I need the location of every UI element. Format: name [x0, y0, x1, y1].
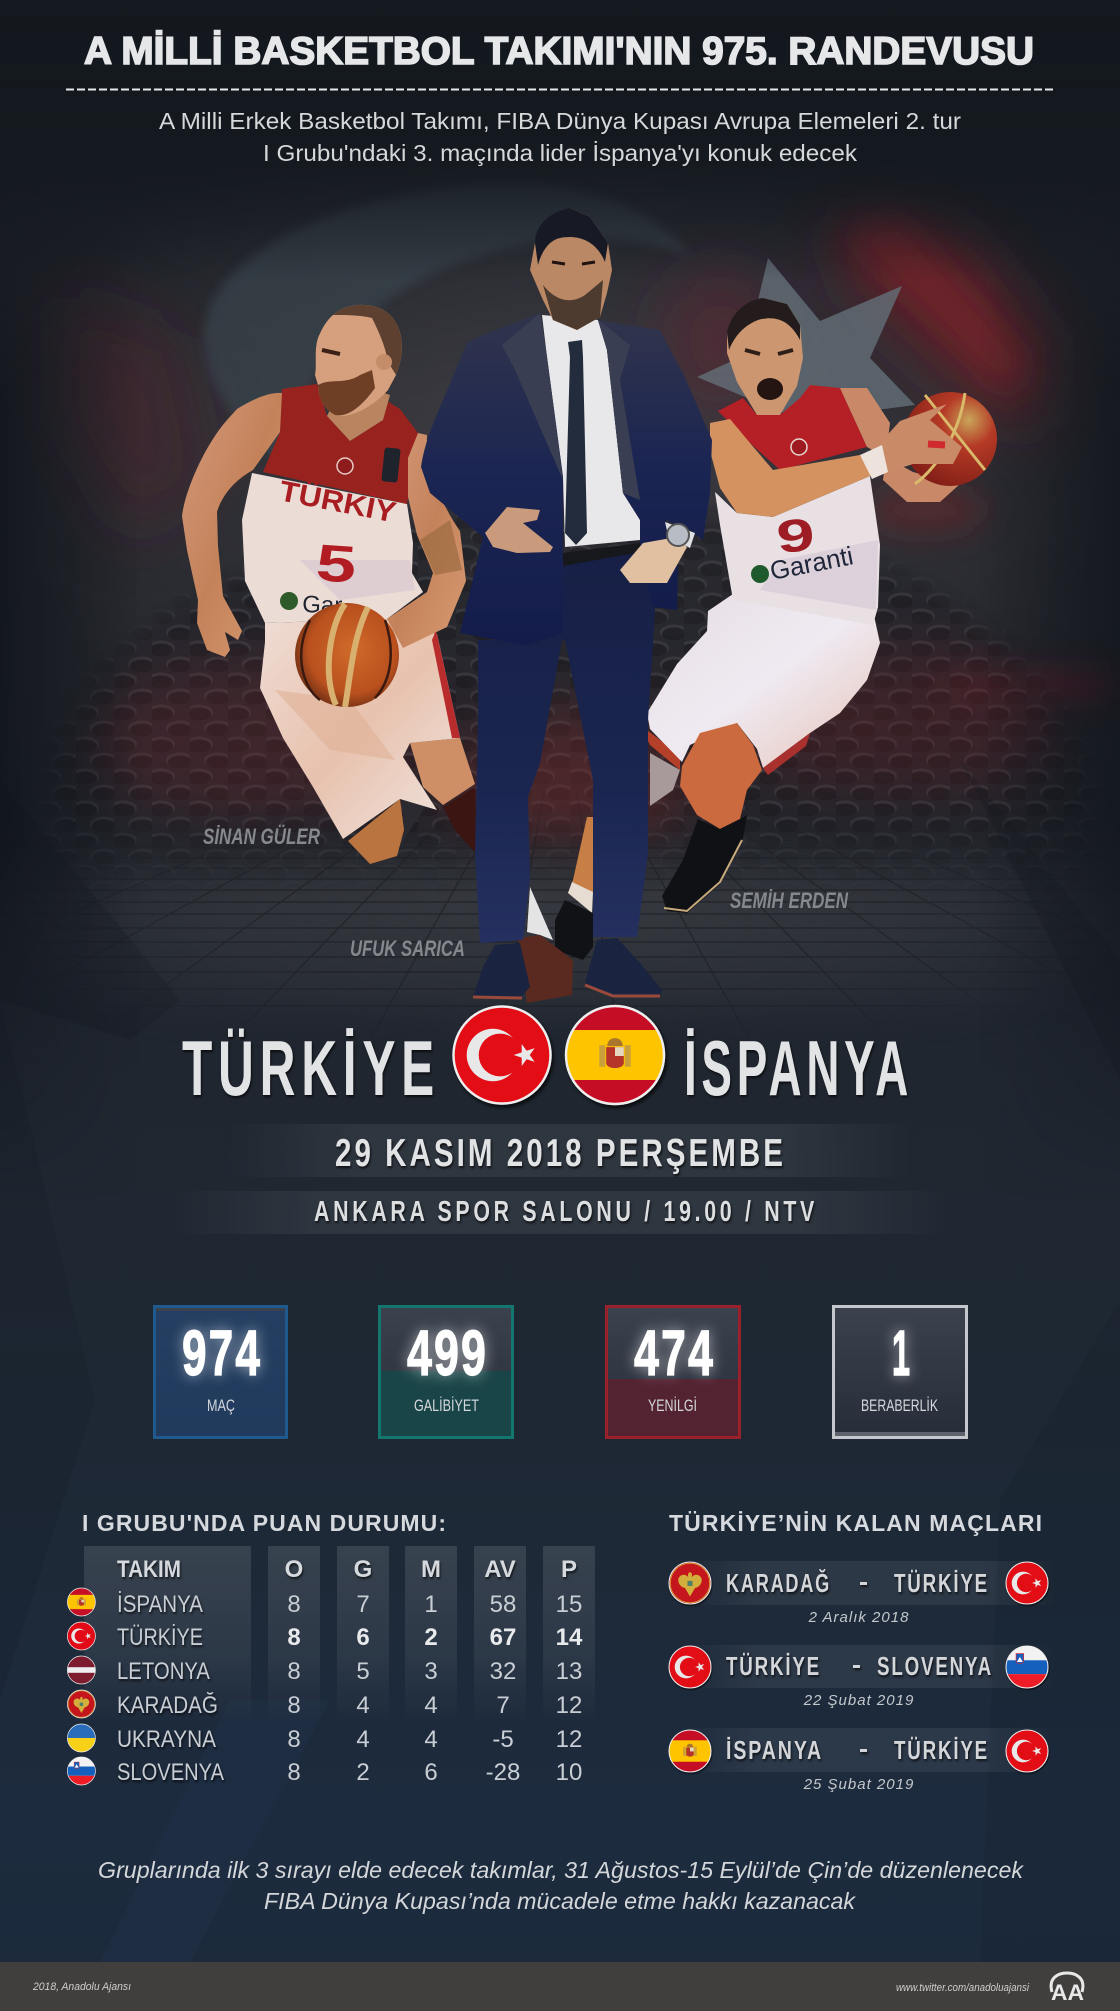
subtitle: I Grubu'ndaki 3. maçında lider İspanya'yı konuk edecek — [263, 140, 858, 166]
star — [697, 258, 915, 420]
venue and broadcast: ANKARA SPOR SALONU / 19.00 / NTV — [314, 1196, 818, 1228]
table header: M — [421, 1556, 441, 1583]
player name: Semih Erden: SEMİH ERDEN — [730, 888, 849, 913]
row: Letonya: LETONYA — [117, 1658, 210, 1685]
floor — [116, 800, 1004, 1000]
row: İspanya: 7 — [356, 1591, 370, 1618]
row: İspanya: 8 — [287, 1591, 301, 1618]
row: Ukrayna: 4 — [424, 1726, 438, 1753]
row: Karadağ: 7 — [496, 1692, 510, 1719]
stat: wins — [380, 1306, 512, 1438]
row: Letonya: 3 — [424, 1658, 438, 1685]
row: Türkiye: 67 — [490, 1624, 516, 1651]
venue and broadcast — [160, 1191, 960, 1234]
row: Ukrayna: 8 — [287, 1726, 301, 1753]
flag: Spain large — [566, 1006, 664, 1104]
row: Slovenya: 2 — [356, 1759, 370, 1786]
subtitle — [159, 108, 961, 166]
match: İspanya - Türkiye: 25 Şubat 2019 — [803, 1776, 914, 1793]
subtitle: A Milli Erkek Basketbol Takımı, FIBA Dünya Kupası Avrupa Elemeleri 2. tur — [159, 108, 961, 134]
match: Türkiye - Slovenya — [669, 1645, 1060, 1709]
player: Sinan Güler: TÜRKİY — [277, 474, 399, 529]
stat: losses — [606, 1306, 740, 1438]
table header: TAKIM — [117, 1556, 181, 1583]
match: Karadağ - Türkiye: 2 Aralık 2018 — [808, 1609, 909, 1626]
row: Karadağ: KARADAĞ — [117, 1692, 218, 1719]
row: Letonya — [67, 1656, 582, 1685]
match: Karadağ - Türkiye: KARADAĞ — [726, 1568, 831, 1598]
row: Ukrayna — [67, 1724, 582, 1753]
player: Sinan Güler — [182, 305, 478, 864]
footer bar — [0, 1962, 1120, 2011]
heading: remaining matches: TÜRKİYE’NİN KALAN MAÇLARI — [669, 1510, 1042, 1536]
row: İspanya: 58 — [490, 1591, 516, 1618]
ball texture — [69, 500, 1068, 866]
player: Semih Erden: 9 — [774, 508, 817, 563]
stat: losses: 474 — [634, 1317, 715, 1389]
match: Karadağ - Türkiye — [669, 1561, 1060, 1626]
row: Slovenya: -28 — [486, 1759, 520, 1786]
match date — [220, 1124, 920, 1177]
coach: Ufuk Sarıca — [421, 208, 712, 1003]
row: Slovenya — [67, 1757, 582, 1786]
footer bar: 2018, Anadolu Ajansı — [32, 1981, 131, 1993]
row: Türkiye — [67, 1622, 583, 1651]
row: İspanya: 1 — [424, 1591, 438, 1618]
row: Slovenya: 8 — [287, 1759, 301, 1786]
player: Semih Erden — [555, 298, 997, 960]
table header: P — [561, 1556, 577, 1583]
row: Türkiye: 14 — [556, 1624, 583, 1651]
title divider — [66, 88, 1053, 90]
match: İspanya - Türkiye — [669, 1728, 1060, 1793]
title: A MİLLİ BASKETBOL TAKIMI'NIN 975. RANDEVUSU — [84, 30, 1034, 73]
team name: Türkiye: TÜRKİYE — [182, 1024, 440, 1112]
stat: wins: 499 — [407, 1317, 488, 1389]
stat: matches: 974 — [182, 1317, 262, 1389]
row: Ukrayna: 12 — [556, 1726, 582, 1753]
icon: AA logo: AA — [1051, 1980, 1084, 2005]
row: Letonya: 8 — [287, 1658, 301, 1685]
table header — [117, 1556, 577, 1583]
shards — [0, 1000, 95, 1700]
player: Sinan Güler: 5 — [314, 534, 358, 595]
stat: draws: BERABERLİK — [861, 1396, 938, 1415]
heading: group standings: I GRUBU'NDA PUAN DURUMU: — [82, 1510, 446, 1536]
row: Karadağ: 8 — [287, 1692, 301, 1719]
footer bar: www.twitter.com/anadoluajansi — [896, 1982, 1029, 1994]
row: Karadağ — [67, 1690, 582, 1719]
player name: Ufuk Sarıca: UFUK SARICA — [350, 936, 465, 961]
stat: wins: GALİBİYET — [414, 1396, 479, 1415]
table header: O — [285, 1556, 303, 1583]
row: Ukrayna: UKRAYNA — [117, 1726, 216, 1753]
row: Slovenya: 10 — [556, 1759, 582, 1786]
crescent — [204, 183, 693, 470]
row: İspanya: İSPANYA — [117, 1591, 203, 1618]
stat: matches — [154, 1306, 286, 1438]
row: Ukrayna: -5 — [492, 1726, 514, 1753]
row: İspanya — [67, 1588, 582, 1618]
table header: G — [354, 1556, 372, 1583]
flag: Turkey large — [454, 1006, 550, 1104]
row: Karadağ: 12 — [556, 1692, 582, 1719]
row: Letonya: 32 — [490, 1658, 516, 1685]
match: Türkiye - Slovenya: SLOVENYA — [877, 1651, 993, 1681]
standings table — [67, 1546, 595, 1786]
stat: matches: MAÇ — [207, 1396, 235, 1415]
match: Türkiye - Slovenya: TÜRKİYE — [726, 1651, 821, 1681]
row: İspanya: 15 — [556, 1591, 582, 1618]
match date: 29 KASIM 2018 PERŞEMBE — [335, 1132, 786, 1175]
row: Karadağ: 4 — [356, 1692, 370, 1719]
player: Semih Erden: Garanti — [767, 540, 856, 586]
team name: Spain: İSPANYA — [684, 1024, 913, 1112]
row: Ukrayna: 4 — [356, 1726, 370, 1753]
qualification note: FIBA Dünya Kupası’nda mücadele etme hakkı kazanacak — [264, 1888, 857, 1914]
match: İspanya - Türkiye: İSPANYA — [726, 1735, 823, 1765]
match: İspanya - Türkiye: TÜRKİYE — [894, 1735, 989, 1765]
stat: draws: 1 — [892, 1317, 910, 1389]
row: Karadağ: 4 — [424, 1692, 438, 1719]
table header: AV — [484, 1556, 516, 1583]
row: Slovenya: SLOVENYA — [117, 1759, 224, 1786]
row: Slovenya: 6 — [424, 1759, 438, 1786]
qualification note — [98, 1857, 1025, 1914]
player name: Sinan Güler: SİNAN GÜLER — [203, 824, 320, 849]
row: Türkiye: 6 — [356, 1624, 370, 1651]
row: Letonya: 5 — [356, 1658, 370, 1685]
row: Türkiye: TÜRKİYE — [117, 1624, 203, 1651]
player: Sinan Güler: Gar — [302, 591, 343, 619]
match: Karadağ - Türkiye: TÜRKİYE — [894, 1568, 989, 1598]
row: Türkiye: 2 — [424, 1624, 438, 1651]
match: Türkiye - Slovenya: 22 Şubat 2019 — [803, 1692, 914, 1709]
row: Türkiye: 8 — [287, 1624, 301, 1651]
stat: losses: YENİLGİ — [648, 1396, 697, 1415]
stat: draws — [834, 1306, 966, 1438]
row: Letonya: 13 — [556, 1658, 582, 1685]
qualification note: Gruplarında ilk 3 sırayı elde edecek takımlar, 31 Ağustos-15 Eylül’de Çin’de düzenlenecek — [98, 1857, 1025, 1883]
